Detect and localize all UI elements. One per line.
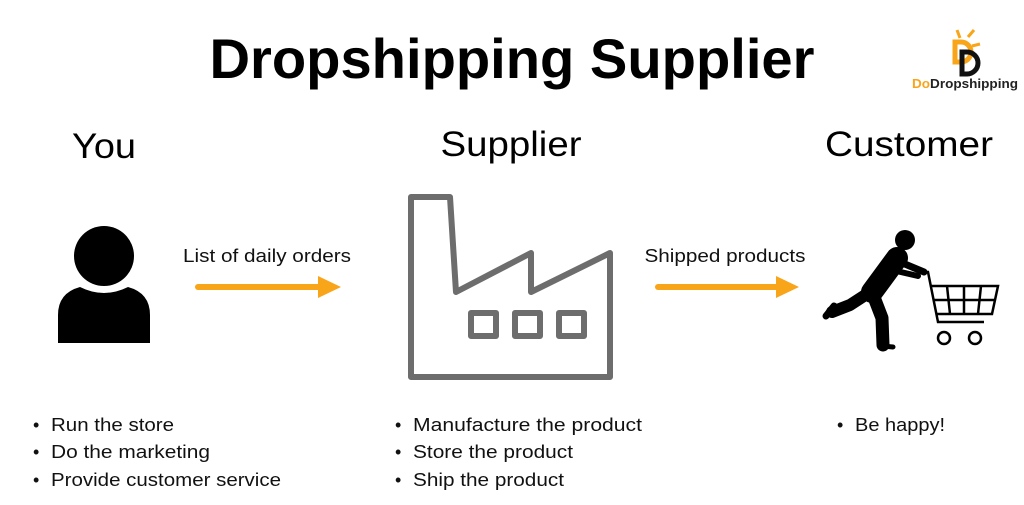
icon: customer with cart xyxy=(826,230,998,347)
arrow label: orders: List of daily orders xyxy=(183,246,351,266)
heading: Customer: Customer xyxy=(825,125,993,164)
list: supplier: • xyxy=(395,415,401,435)
list: supplier: Store the product xyxy=(413,442,573,462)
list: you: • xyxy=(33,415,39,435)
list: you: • xyxy=(33,470,39,490)
list: you: Run the store xyxy=(51,415,174,435)
logo xyxy=(912,30,1018,91)
icon: person xyxy=(58,226,150,343)
list: you: Provide customer service xyxy=(51,470,281,490)
arrow label: shipped: Shipped products xyxy=(644,246,806,266)
list: supplier xyxy=(395,415,642,490)
heading: Supplier: Supplier xyxy=(440,125,582,164)
icon: factory xyxy=(411,197,610,377)
title: Dropshipping Supplier xyxy=(210,27,814,90)
list: supplier: • xyxy=(395,442,401,462)
heading: You: You xyxy=(72,127,136,166)
arrow: supplier to customer xyxy=(655,276,799,298)
list: you xyxy=(33,415,281,490)
list: supplier: Manufacture the product xyxy=(413,415,642,435)
list: customer: Be happy! xyxy=(855,415,945,435)
arrow: you to supplier xyxy=(195,276,341,298)
list: you: • xyxy=(33,442,39,462)
logo: DoDropshipping xyxy=(912,76,1018,91)
list: supplier: • xyxy=(395,470,401,490)
list: customer: • xyxy=(837,415,843,435)
list: supplier: Ship the product xyxy=(413,470,564,490)
list: you: Do the marketing xyxy=(51,442,210,462)
